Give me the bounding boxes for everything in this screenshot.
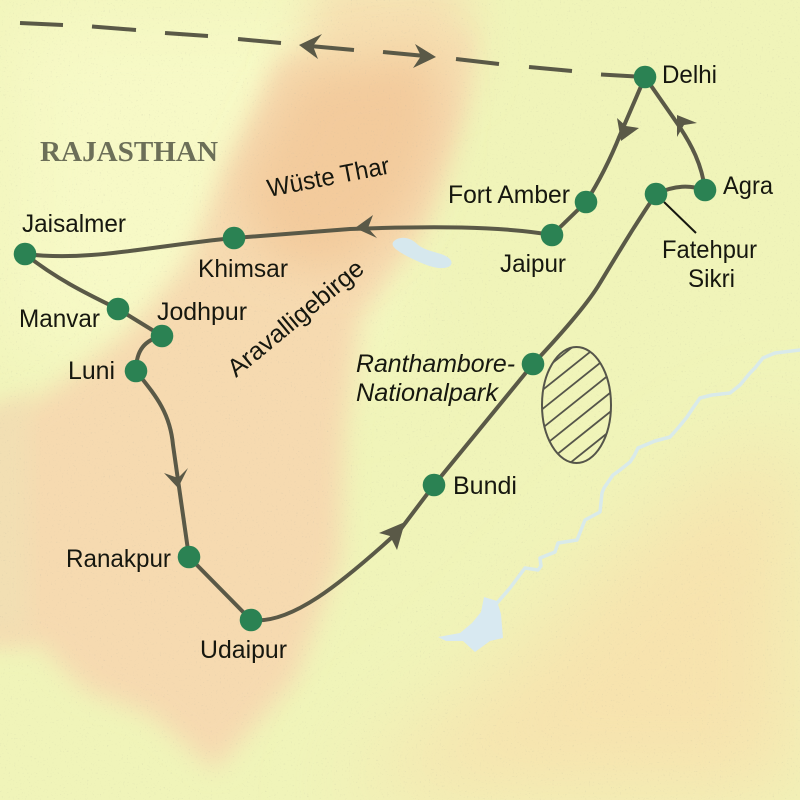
- city labels: Fatehpur: [662, 236, 757, 264]
- city labels: Jaisalmer: [22, 210, 126, 238]
- dashed flight line with double arrows: [20, 23, 645, 77]
- national park hatched area: [541, 346, 612, 464]
- route line: [25, 77, 705, 620]
- city labels: Jodhpur: [157, 298, 247, 326]
- city labels: [19, 61, 773, 664]
- city labels: Ranakpur: [66, 545, 171, 573]
- city labels: Khimsar: [198, 255, 288, 283]
- city labels: Luni: [68, 357, 115, 385]
- city labels: Fort Amber: [448, 181, 570, 209]
- leader line: Fatehpur Sikri: [664, 202, 696, 233]
- city labels: Delhi: [662, 61, 717, 89]
- city labels: Bundi: [453, 472, 517, 500]
- city labels: Nationalpark: [356, 379, 500, 407]
- city labels: Sikri: [688, 265, 735, 293]
- region title: RAJASTHAN: [40, 136, 218, 168]
- city labels: Udaipur: [200, 636, 287, 664]
- city labels: Jaipur: [500, 250, 566, 278]
- river and reservoir: [438, 350, 800, 652]
- route arrowheads: [164, 115, 697, 550]
- lake near Jaipur: [393, 238, 452, 268]
- label: Wüste Thar: Wüste Thar: [265, 152, 392, 203]
- city labels: Manvar: [19, 305, 100, 333]
- city markers: [14, 66, 716, 631]
- label: Aravalligebirge: Aravalligebirge: [222, 254, 369, 383]
- city labels: Ranthambore-: [356, 350, 515, 378]
- city labels: Agra: [723, 172, 773, 200]
